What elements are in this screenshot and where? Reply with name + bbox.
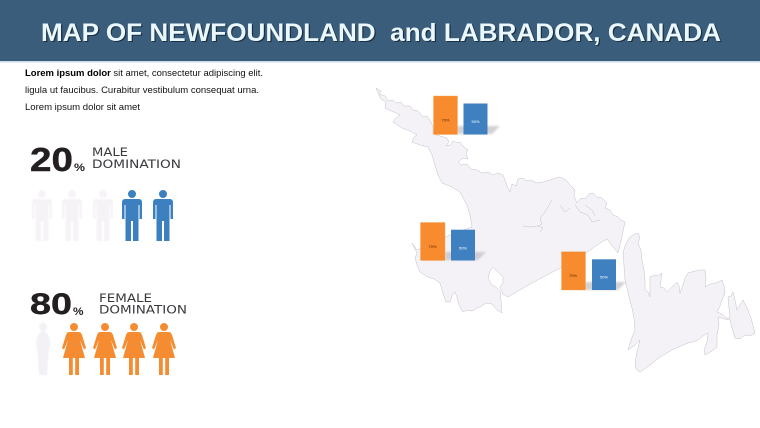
- chart: eastern bars: [562, 252, 626, 290]
- chart: northern bars: 50%: [471, 119, 480, 124]
- female statistic heading: %: [73, 306, 84, 318]
- chart: western bars: 50%: [459, 246, 467, 250]
- male statistic heading: 20: [30, 141, 73, 178]
- female statistic heading: 80: [30, 288, 72, 321]
- chart: western bars: [420, 222, 486, 260]
- male statistic heading: [30, 141, 181, 178]
- intro text block: Lorem ipsum dolor sit amet, consectetur adipiscing elit.: [25, 68, 263, 78]
- male statistic heading: DOMINATION: [92, 157, 181, 171]
- chart: eastern bars: 70%: [569, 273, 577, 278]
- map: Labrador: [376, 88, 625, 313]
- female statistic heading: DOMINATION: [99, 302, 187, 316]
- male statistic heading: MALE: [92, 145, 128, 159]
- intro text block: ligula ut faucibus. Curabitur vestibulum consequat urna.: [25, 85, 259, 95]
- map: Newfoundland: [623, 233, 755, 372]
- female pictogram row: [36, 323, 176, 375]
- title banner: MAP OF NEWFOUNDLAND and LABRADOR, CANADA: [42, 20, 722, 48]
- chart: western bars: 70%: [428, 244, 437, 249]
- female statistic heading: [30, 288, 187, 321]
- chart: northern bars: 70%: [441, 118, 450, 122]
- male statistic heading: %: [74, 162, 85, 174]
- map: Lake Melville inlet: [523, 200, 600, 232]
- chart: northern bars: [434, 96, 500, 134]
- female statistic heading: FEMALE: [99, 291, 152, 305]
- male pictogram row: [32, 190, 173, 241]
- intro text block: Lorem ipsum dolor sit amet: [25, 102, 141, 112]
- title banner: MAP OF NEWFOUNDLAND and LABRADOR, CANADA: [41, 19, 721, 47]
- title banner: [0, 0, 760, 62]
- intro text block: [25, 68, 263, 112]
- chart: eastern bars: 50%: [600, 274, 608, 280]
